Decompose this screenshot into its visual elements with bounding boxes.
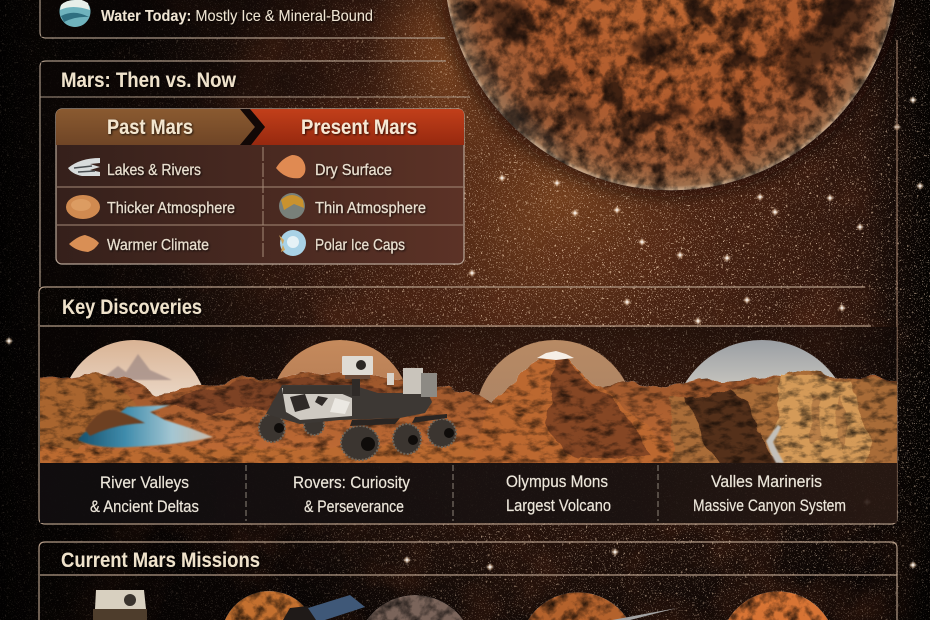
caption: rovers: Rovers: Curiosity <box>293 473 410 492</box>
chassis <box>266 385 432 424</box>
Olympus Mons <box>482 358 648 428</box>
caption: rovers: & Perseverance <box>304 497 404 516</box>
icon: grey planet <box>367 595 463 620</box>
icon: orbiter and dark planet <box>528 592 677 620</box>
right frame line <box>896 40 898 516</box>
caption: Valles Marineris: Valles Marineris <box>711 472 822 491</box>
row: lakes and rivers: Lakes & Rivers <box>107 162 201 179</box>
dome: Olympus sky <box>479 340 625 403</box>
dome: rover sky <box>277 340 403 380</box>
heading: Mars then vs now: Mars: Then vs. Now <box>61 69 237 92</box>
comparison table <box>56 109 464 264</box>
caption: river valleys: River Valleys <box>100 473 189 492</box>
caption: river valleys <box>90 473 199 516</box>
caption: Valles Marineris <box>693 472 846 515</box>
wheels <box>259 414 456 460</box>
panel: key discoveries <box>30 287 910 524</box>
terrain <box>40 358 897 463</box>
header: present mars: Present Mars <box>301 116 417 139</box>
row: lakes and rivers <box>68 158 201 179</box>
row: dry surface: Dry Surface <box>315 162 392 179</box>
equipment pods <box>387 373 394 385</box>
planet Mars <box>440 0 902 200</box>
mission artwork row <box>93 590 828 620</box>
row: dry surface <box>276 155 392 179</box>
row: polar ice caps <box>279 230 405 256</box>
snow cap <box>537 351 574 360</box>
row: warmer climate <box>69 235 209 254</box>
header: past mars <box>56 109 255 145</box>
Valles Marineris canyon <box>668 370 897 463</box>
panel: water today (partial) <box>40 0 445 38</box>
row: thin atmosphere <box>279 193 426 219</box>
heading: current Mars missions: Current Mars Missions <box>61 549 260 572</box>
lake <box>78 405 213 447</box>
caption: river valleys: & Ancient Deltas <box>90 497 199 516</box>
icon: water globe <box>60 0 90 27</box>
text: water today: Water Today: Mostly Ice & Mineral-Bound <box>101 8 373 25</box>
canyon river <box>766 425 784 463</box>
mast and head <box>352 379 360 396</box>
rover <box>259 356 456 460</box>
dome: river valleys sky <box>70 340 202 396</box>
row: thin atmosphere: Thin Atmosphere <box>315 200 426 217</box>
landscape strip <box>40 340 897 463</box>
panel: Mars then vs now <box>40 61 470 287</box>
caption: Valles Marineris: Massive Canyon System <box>693 496 846 515</box>
icon: rover camera head <box>93 590 147 620</box>
panel: current Mars missions <box>39 542 897 620</box>
caption strip <box>40 463 897 523</box>
header: present mars <box>240 109 464 145</box>
caption: rovers <box>293 473 410 516</box>
icon: orbiter and Mars <box>225 591 365 620</box>
caption: Olympus Mons: Olympus Mons <box>506 472 608 491</box>
row: thicker atmosphere <box>66 195 235 219</box>
dome: Valles sky <box>685 340 836 383</box>
icon: orange planet <box>728 591 828 620</box>
caption: Olympus Mons: Largest Volcano <box>506 496 611 515</box>
caption: Olympus Mons <box>506 472 611 515</box>
row: polar ice caps: Polar Ice Caps <box>315 237 405 254</box>
row: warmer climate: Warmer Climate <box>107 237 209 254</box>
header: past mars: Past Mars <box>107 116 193 139</box>
heading: key discoveries: Key Discoveries <box>62 296 202 319</box>
row: thicker atmosphere: Thicker Atmosphere <box>107 200 235 217</box>
